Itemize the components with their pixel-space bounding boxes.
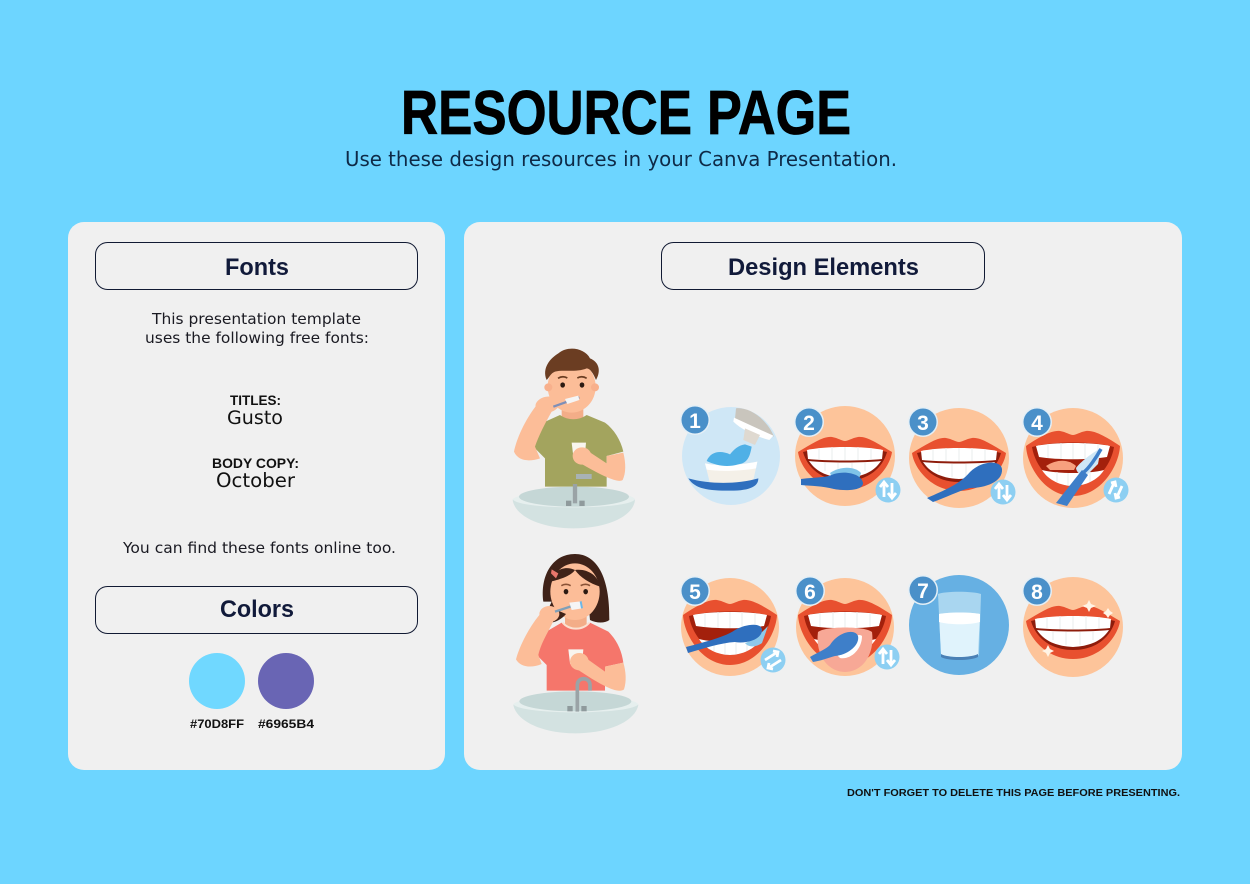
swatch: light blue	[189, 653, 245, 731]
icon: step 2 brushing front teeth	[794, 406, 900, 506]
icon: step 2 brushing front teeth: 2	[803, 412, 815, 435]
icon: step 7 glass of water	[908, 575, 1009, 675]
icon: step 4 brushing inner teeth	[1022, 407, 1128, 508]
icon: step 5 brushing chewing surface	[680, 576, 786, 676]
illustration: girl brushing teeth	[513, 554, 638, 733]
text block: intro: uses the following free fonts:	[145, 329, 369, 347]
icon: step 4 brushing inner teeth: 4	[1031, 412, 1043, 435]
footer note: DON'T FORGET TO DELETE THIS PAGE BEFORE PRESENTING.	[847, 787, 1180, 799]
title: RESOURCE	[401, 79, 692, 148]
icon: step 8 clean smile: 8	[1031, 581, 1043, 604]
swatch: purple: #6965B4	[258, 719, 315, 731]
text block: body font: BODY COPY:	[212, 455, 299, 471]
panel: fonts and colors	[68, 222, 445, 770]
text block: intro	[145, 310, 369, 347]
subtitle: Use these design resources in your Canva Presentation.	[345, 147, 897, 171]
heading: fonts	[96, 242, 418, 290]
text block: intro: This presentation template	[151, 310, 361, 328]
heading: design elements: Design Elements	[728, 254, 919, 281]
icon: step 6 brushing tongue	[795, 576, 900, 676]
panel: design elements	[464, 222, 1182, 770]
illustration: boy brushing teeth	[513, 349, 635, 528]
icon: step 3 brushing side teeth	[908, 407, 1016, 508]
icon: step 6 brushing tongue: 6	[804, 581, 816, 604]
text block: title font: Gusto	[227, 407, 283, 429]
icon: step 7 glass of water: 7	[917, 580, 929, 603]
text block: title font	[227, 392, 283, 429]
icon: step 3 brushing side teeth: 3	[917, 412, 929, 435]
heading: colors	[96, 586, 418, 634]
text block: body font: October	[216, 469, 296, 492]
icon: step 8 clean smile	[1022, 576, 1123, 677]
title: PAGE	[707, 79, 851, 148]
icon: step 1 toothpaste	[680, 405, 780, 505]
text block: note: You can find these fonts online too.	[122, 539, 396, 557]
heading: fonts: Fonts	[225, 254, 289, 281]
icon: step 1 toothpaste: 1	[689, 410, 701, 433]
swatch: purple	[258, 653, 315, 731]
heading: design elements	[662, 242, 984, 290]
icon: step 5 brushing chewing surface: 5	[689, 581, 701, 604]
text block: title font: TITLES:	[230, 392, 281, 408]
text block: body font	[212, 455, 299, 492]
swatch: light blue: #70D8FF	[190, 719, 244, 731]
heading: colors: Colors	[220, 596, 294, 623]
